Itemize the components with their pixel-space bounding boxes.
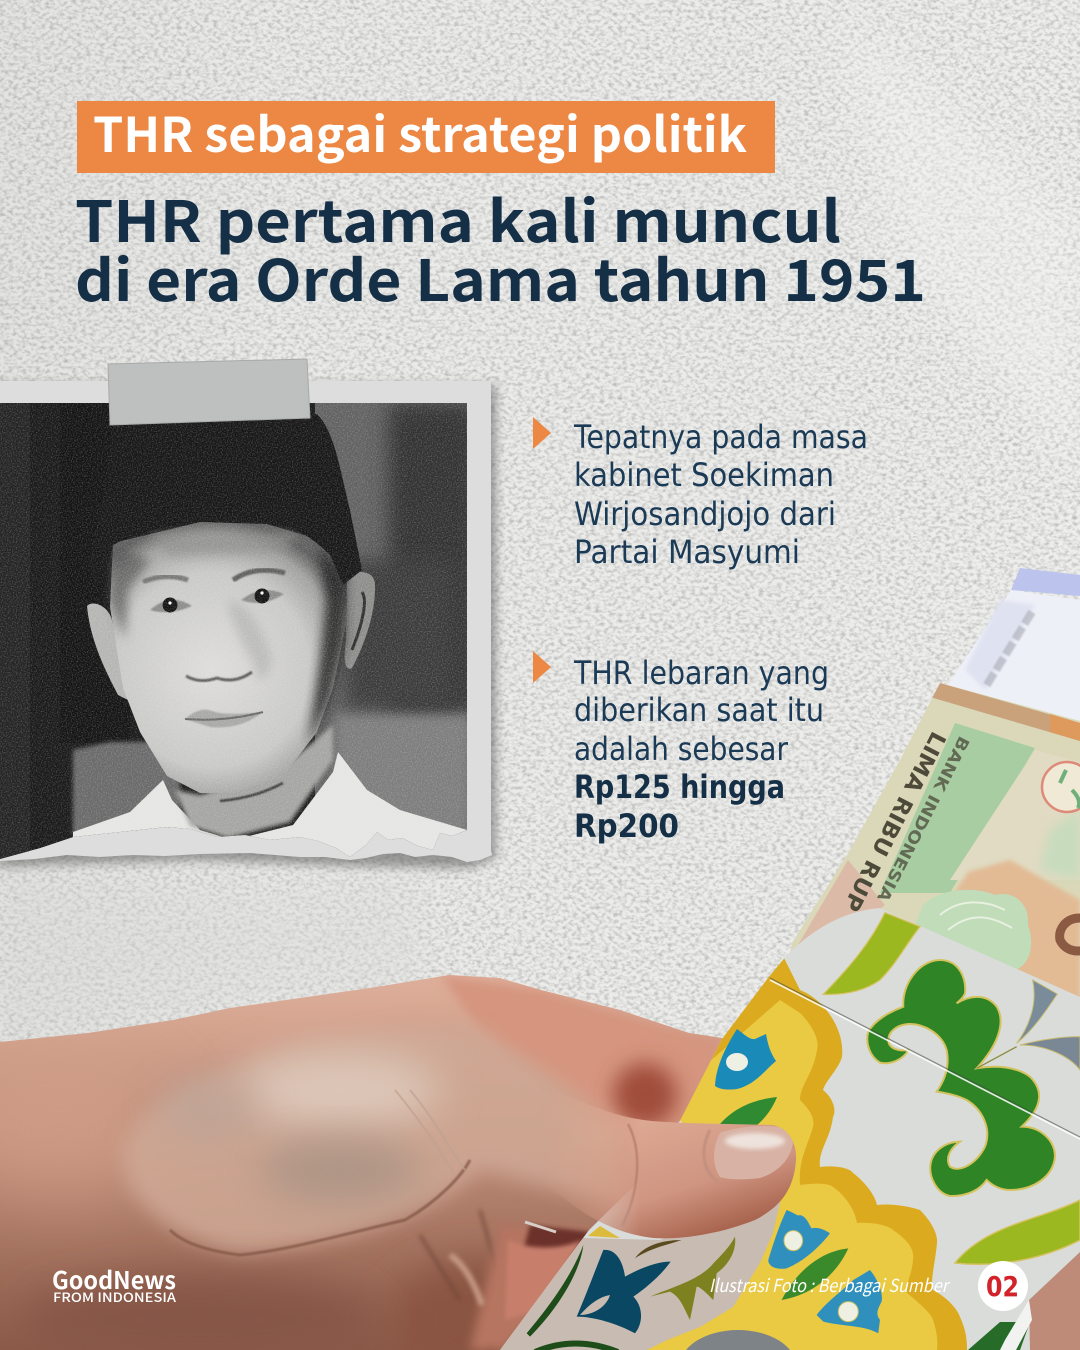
finger at lower right corner [1000, 1252, 1080, 1350]
logo: GoodNews from Indonesia: FROM INDONESIA [53, 1287, 177, 1306]
green curve [527, 1245, 583, 1337]
portrait photograph [0, 403, 478, 880]
title: di era Orde Lama tahun 1951 [75, 236, 926, 318]
page number badge: 02 [986, 1270, 1019, 1303]
flower: blue top [715, 1029, 776, 1090]
text block 2: THR lebaran yang [573, 654, 829, 692]
flower: blue bottom [817, 1270, 882, 1333]
thumb [500, 1070, 810, 1250]
title [75, 177, 926, 318]
leaf: green middle [782, 1248, 848, 1300]
text block 2 [573, 654, 829, 845]
envelope fold crease [770, 978, 1080, 1137]
thumb mound [123, 1027, 640, 1255]
grey disc at bottom edge [686, 1330, 790, 1350]
leaf: lime lower right [955, 1200, 1080, 1264]
leaf: lime top [823, 913, 920, 994]
flower and leaf group on flap [527, 1210, 882, 1337]
thumb nail [714, 1126, 793, 1179]
text block 2: Rp125 hingga [574, 768, 785, 806]
banknote [790, 683, 1080, 997]
leaf: green [720, 1097, 777, 1125]
nose [228, 600, 272, 679]
text block 1: kabinet Soekiman [574, 456, 834, 494]
text block 2: adalah sebesar [574, 730, 789, 768]
eyes [150, 600, 192, 612]
arc at bottom of flap [535, 1344, 618, 1350]
flower: olive [650, 1237, 735, 1320]
photo credit: Ilustrasi Foto : Berbagai Sumber [709, 1272, 951, 1298]
leaf: grey blue [1017, 980, 1057, 1043]
yellow scalloped panel [680, 958, 967, 1350]
banknote: LIMA RIBU RUP [838, 727, 950, 915]
text block 1: Tepatnya pada masa [573, 418, 868, 456]
white-pink lower flap [500, 1190, 783, 1350]
eyebrows [143, 576, 188, 582]
page number badge [978, 1261, 1028, 1311]
palm crease [170, 1160, 470, 1255]
text block 2: Rp200 [574, 807, 679, 845]
icon: orange arrow [533, 651, 551, 683]
banknote printed text: BANK INDONESIA [873, 733, 973, 906]
hand [0, 975, 722, 1350]
text block 2: diberikan saat itu [574, 691, 824, 729]
frame shadow [0, 385, 496, 868]
white paper slip behind banknote [947, 568, 1080, 722]
mouth [185, 710, 263, 727]
envelope [500, 905, 1080, 1350]
shirt [73, 752, 467, 865]
bullet 1 [533, 417, 868, 571]
swirl: big green ornament [867, 960, 1055, 1196]
flower: dark blue [577, 1250, 671, 1333]
bullet 2 [533, 651, 829, 845]
panel: taped portrait photo [0, 359, 496, 880]
text block 1 [573, 418, 868, 571]
text block 1: Wirjosandjojo dari [574, 495, 836, 533]
flower: blue middle [768, 1210, 830, 1269]
finger above thumb [440, 975, 722, 1130]
ears [87, 604, 128, 700]
ornaments on white panel [823, 913, 1080, 1196]
torn photo paper frame [0, 381, 492, 862]
lower fingers [468, 1227, 528, 1350]
face [110, 522, 347, 793]
fez hat [110, 414, 362, 585]
tape [108, 359, 310, 425]
title: THR pertama kali muncul [75, 177, 841, 259]
logo: GoodNews from Indonesia: GoodNews [52, 1261, 176, 1296]
tag: section label: THR sebagai strategi politik [93, 96, 747, 166]
icon: orange arrow [533, 417, 551, 449]
text block 1: Partai Masyumi [574, 533, 800, 571]
